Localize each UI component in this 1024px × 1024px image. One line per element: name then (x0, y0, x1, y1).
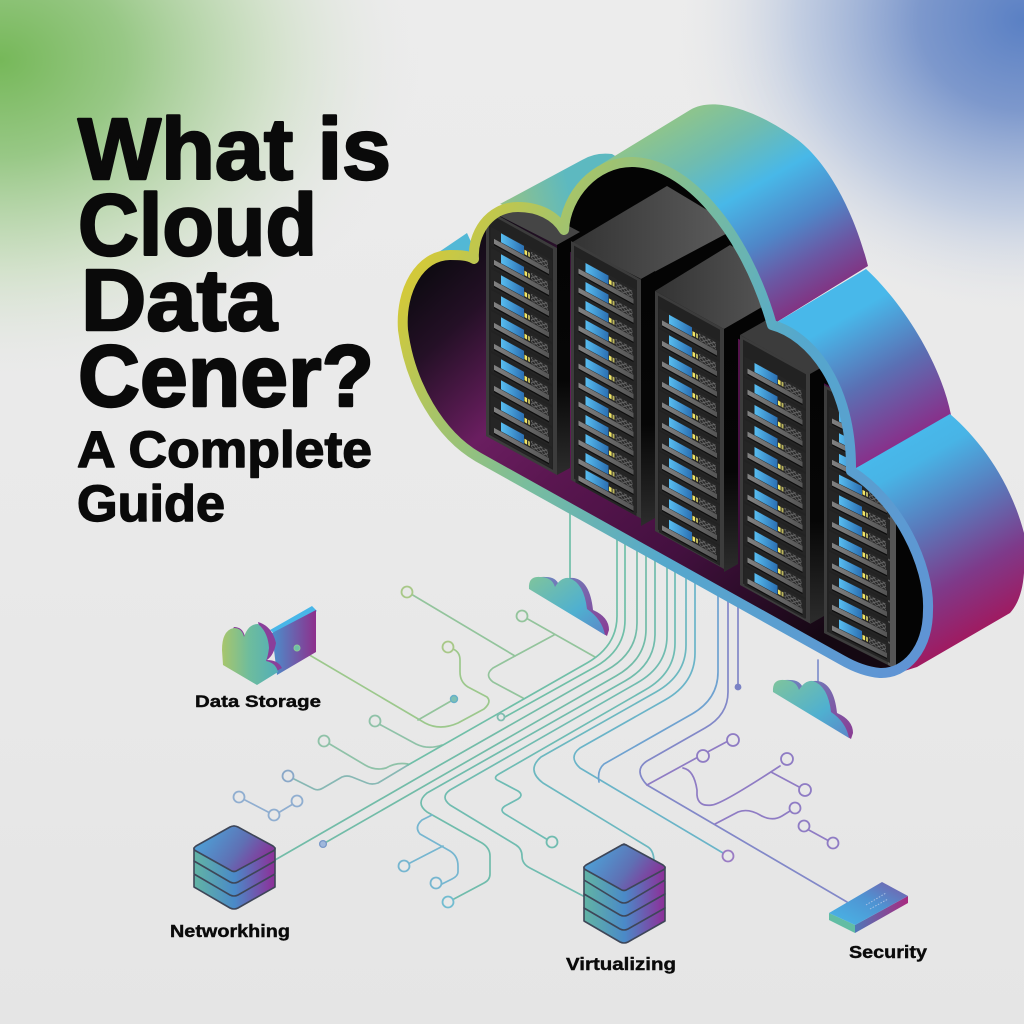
server rack 1 (486, 195, 580, 475)
title: Cloud (78, 177, 317, 274)
cloud back lobe 4 (772, 269, 951, 471)
label: security: Security (849, 942, 927, 962)
circuit lines: left middle group (282, 716, 442, 790)
server rack 3 (655, 245, 762, 572)
cloud outline ring (403, 162, 928, 673)
circuit lines: node trio (234, 792, 302, 820)
cloud interior (408, 216, 891, 668)
server rack 4 (740, 320, 824, 624)
title (78, 101, 391, 425)
icon: small cloud right (773, 680, 853, 739)
title: What is (78, 101, 391, 198)
label: virtualizing: Virtualizing (566, 954, 676, 974)
cloud back lobe 3 (600, 104, 868, 325)
subtitle: A Complete (77, 421, 372, 478)
icon: virtualizing stack (584, 844, 665, 943)
icon: networking stack (194, 826, 275, 909)
cloud back lobe 5 (851, 414, 1024, 677)
icon: data storage (222, 606, 317, 685)
subtitle: Guide (77, 475, 225, 532)
icon: security device (829, 882, 908, 933)
subtitle (77, 421, 372, 532)
cloud back lobe 1 (436, 233, 480, 262)
cloud extrusion body (436, 104, 1024, 677)
cloud back lobe 2 (500, 154, 630, 240)
cloud front opening with server racks (408, 167, 924, 668)
label: networking: Networkhing (170, 921, 290, 941)
circuit lines: right purple branches (647, 734, 838, 848)
icon: small cloud left (529, 577, 609, 636)
circuit lines: upper-left green group (301, 586, 595, 727)
circuit lines: main bundle from cloud (275, 500, 847, 908)
server rack 5 (824, 385, 896, 669)
title: Cener? (78, 328, 374, 425)
interior black backdrop (558, 167, 923, 664)
label: data storage: Data Storage (195, 692, 321, 711)
circuit lines: lower-left blue branches (398, 815, 458, 888)
server rack 2 (571, 186, 737, 526)
title: Data (81, 252, 278, 349)
